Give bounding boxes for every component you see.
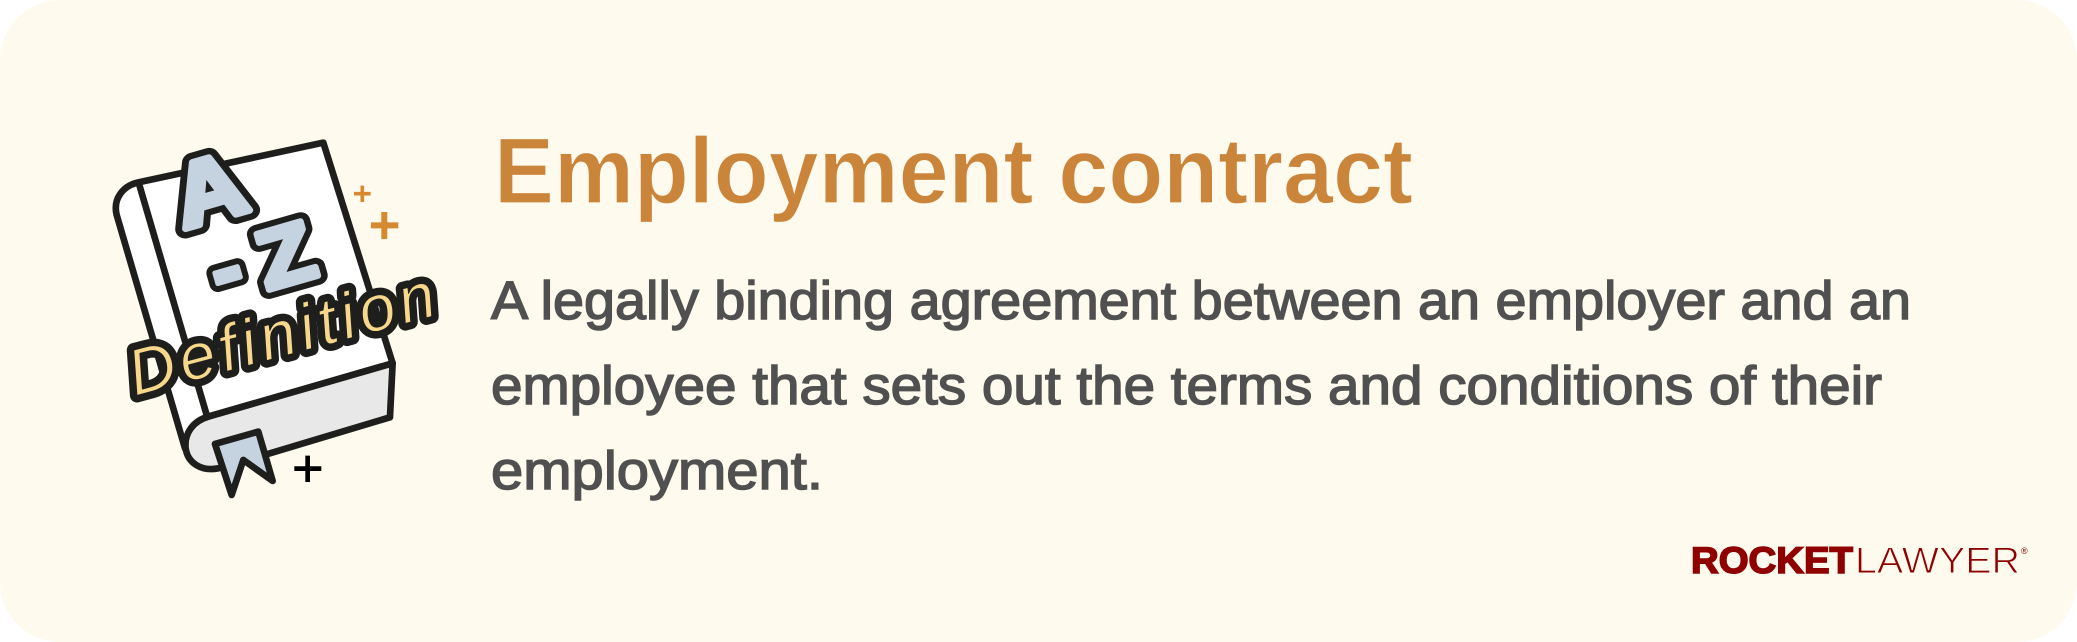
logo: Rocket Lawyer: ROCKET [1691,540,1853,581]
letter Z: Z [246,203,325,308]
hyphen: - [196,213,255,322]
definition text block: employee that sets out the terms and conditions of their [491,356,1882,416]
book cover [116,143,393,448]
book spine line [139,185,207,415]
letter A: A [161,132,258,249]
definition text block [491,271,1911,501]
script word: Definition: Definition [120,257,443,409]
script word: Definition: Definition [120,257,443,409]
definition text block: A legally binding agreement between an employer and an [491,271,1911,331]
logo: Rocket Lawyer: ® [2021,546,2028,556]
sparkle: small orange plus [354,186,371,202]
hyphen: - [196,213,255,322]
letter A: A [161,132,258,249]
icon: definition book [116,132,443,495]
sparkle: large orange plus [371,212,398,239]
bookmark ribbon [215,432,273,495]
sparkle: black plus [294,456,321,482]
definition text block: employment. [491,441,823,501]
letter Z: Z [246,203,325,308]
book pages [185,363,393,469]
logo: Rocket Lawyer: LAWYER [1855,540,2020,581]
logo: Rocket Lawyer [1691,540,2028,581]
title: Employment contract [494,118,1413,223]
